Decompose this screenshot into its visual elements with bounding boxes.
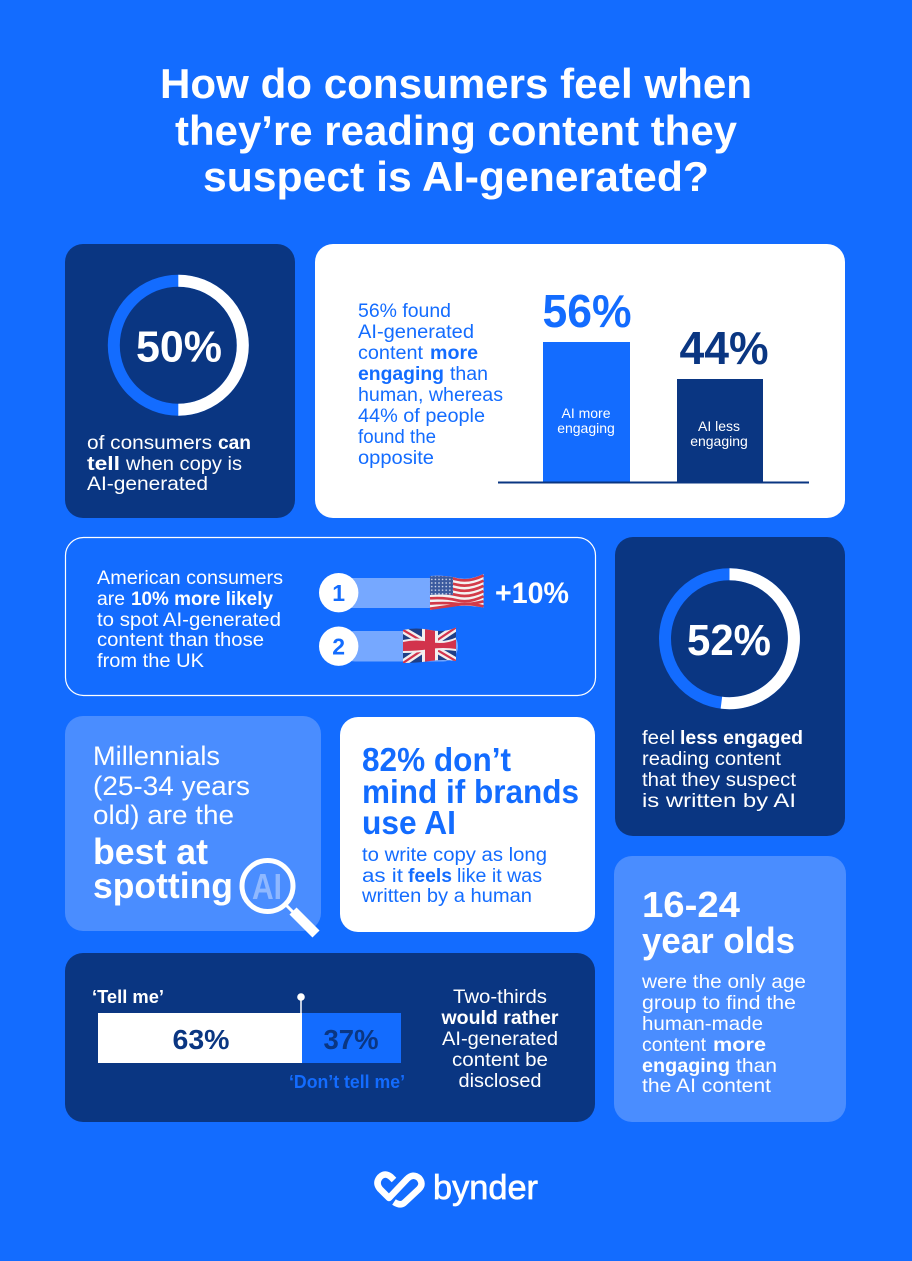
text: copy as long: as it bbox=[362, 866, 404, 887]
text: best at spotting: spotting bbox=[93, 865, 233, 906]
text: less engaged: that they suspect bbox=[642, 770, 797, 791]
donut chart: 50% bbox=[114, 281, 243, 410]
text: +10%: +10% bbox=[495, 577, 569, 610]
text: engagement summary: found the bbox=[358, 427, 436, 448]
text: American consumers: from the UK bbox=[97, 651, 204, 672]
icon: magnifier: AI bbox=[252, 866, 282, 907]
logo: bynder: bynder bbox=[433, 1169, 538, 1207]
panel: engagement bar chart bbox=[315, 244, 845, 518]
text: only age group: content bbox=[642, 1035, 707, 1056]
text: 16-24 headline: year olds bbox=[642, 920, 795, 961]
panel: 52% less engaged bbox=[615, 537, 845, 836]
text: Millennials bbox=[93, 741, 250, 830]
text: two-thirds: Two-thirds bbox=[453, 987, 547, 1008]
text: engagement summary: than bbox=[450, 364, 488, 385]
bar: AI less engaging bbox=[677, 322, 768, 482]
panel: Millennials bbox=[65, 716, 321, 934]
text: engagement summary: engaging bbox=[358, 364, 444, 385]
text: Millennials: (25-34 years bbox=[93, 771, 250, 801]
text: 82% headline: mind if brands bbox=[362, 773, 579, 810]
donut chart: 50%: 50% bbox=[136, 322, 222, 372]
text: less engaged bbox=[642, 728, 803, 812]
panel: 16-24 year olds bbox=[614, 856, 846, 1122]
panel: 82% don't mind bbox=[340, 717, 595, 932]
text: American consumers: American consumers bbox=[97, 568, 283, 589]
text: copy as long: like it was bbox=[457, 866, 542, 887]
text: 16-24 headline: 16-24 bbox=[642, 884, 740, 925]
text: engagement summary: 56% found bbox=[358, 301, 451, 322]
text: only age group: were the only age bbox=[641, 972, 806, 993]
ranking bar 2: 2 bbox=[332, 634, 345, 660]
icon: UK flag bbox=[403, 626, 457, 664]
title: suspect is AI-generated? bbox=[203, 153, 709, 200]
text: 16-24 headline bbox=[642, 884, 795, 961]
text: two-thirds: would rather bbox=[440, 1008, 559, 1029]
text: only age group: the AI content bbox=[642, 1076, 772, 1097]
text: best at spotting bbox=[93, 831, 233, 906]
bar: AI more engaging: AI more bbox=[561, 405, 611, 421]
text: best at spotting: best at bbox=[93, 831, 208, 872]
bar: AI less engaging: 44% bbox=[680, 322, 768, 374]
panel: 50% can tell bbox=[65, 244, 295, 518]
text: two-thirds: disclosed bbox=[458, 1071, 542, 1092]
text: only age group: engaging bbox=[642, 1056, 730, 1077]
text: engagement summary: more bbox=[430, 343, 478, 364]
label: Tell me: ‘Tell me’ bbox=[92, 987, 164, 1007]
text: can tell: tell bbox=[87, 454, 120, 475]
text: can tell: AI-generated bbox=[87, 474, 208, 495]
text: engagement summary: human, whereas bbox=[358, 385, 503, 406]
panel: US vs UK bbox=[66, 538, 596, 696]
text: copy as long bbox=[361, 845, 547, 907]
text: two-thirds: AI-generated bbox=[442, 1029, 558, 1050]
text: American consumers bbox=[97, 568, 283, 672]
text: engagement summary: 44% of people bbox=[358, 406, 485, 427]
text: 82% headline bbox=[362, 741, 579, 841]
marker pin bbox=[297, 993, 305, 1014]
text: less engaged: is written by AI bbox=[642, 791, 796, 812]
text: engagement summary: opposite bbox=[358, 448, 434, 469]
text: engagement summary: AI-generated bbox=[358, 322, 474, 343]
text: American consumers: content than those bbox=[97, 630, 264, 651]
text: engagement summary bbox=[358, 301, 503, 469]
ranking bar 1 bbox=[319, 573, 432, 612]
text: American consumers: 10% more likely bbox=[131, 589, 273, 610]
bar: AI more engaging bbox=[542, 285, 632, 482]
panel: disclosure bbox=[65, 953, 595, 1122]
text: only age group: more bbox=[713, 1035, 766, 1056]
title: they’re reading content they bbox=[175, 107, 738, 154]
text: can tell: when copy is bbox=[125, 454, 242, 475]
text: only age group: human-made bbox=[642, 1014, 763, 1035]
text: copy as long: written by a human bbox=[361, 886, 532, 907]
donut chart: 52% bbox=[665, 574, 794, 703]
text: can tell: can bbox=[218, 433, 251, 454]
text: Millennials: old) are the bbox=[93, 800, 234, 830]
text: American consumers: to spot AI-generated bbox=[97, 610, 281, 631]
text: can tell bbox=[87, 433, 251, 495]
text: copy as long: to write copy as long bbox=[362, 845, 547, 866]
icon: magnifier bbox=[242, 860, 316, 934]
text: can tell: of consumers bbox=[87, 433, 212, 454]
text: two-thirds bbox=[440, 987, 559, 1092]
text: American consumers: are bbox=[97, 589, 125, 610]
text: only age group: group to find the bbox=[642, 993, 796, 1014]
ranking bar 1: 1 bbox=[332, 580, 345, 606]
text: copy as long: feels bbox=[408, 866, 452, 887]
label: Don't tell me: ‘Don’t tell me’ bbox=[289, 1072, 405, 1092]
text: less engaged: feel bbox=[642, 728, 675, 749]
text: engagement summary: content bbox=[358, 343, 424, 364]
ranking bar 2 bbox=[319, 626, 458, 666]
bar: AI less engaging: AI less bbox=[698, 418, 740, 434]
text: two-thirds: content be bbox=[452, 1050, 548, 1071]
donut chart: 52%: 52% bbox=[687, 616, 771, 665]
text: Millennials: Millennials bbox=[93, 741, 220, 771]
text: 82% headline: use AI bbox=[362, 804, 456, 841]
stacked bar: 37%: 37% bbox=[324, 1024, 379, 1055]
text: less engaged: reading content bbox=[642, 749, 782, 770]
bar: AI less engaging: engaging bbox=[690, 433, 748, 449]
stacked bar: 63%: 63% bbox=[172, 1024, 230, 1055]
title bbox=[160, 60, 752, 200]
stacked bar: 63% bbox=[98, 1013, 302, 1063]
bar: AI more engaging: 56% bbox=[542, 285, 632, 337]
logo: bynder bbox=[378, 1169, 538, 1207]
text: 82% headline: 82% don’t bbox=[362, 741, 511, 778]
icon: US flag bbox=[430, 574, 484, 610]
bar: AI more engaging: engaging bbox=[557, 420, 615, 436]
stacked bar: 37% bbox=[302, 1013, 401, 1063]
icon: bynder heart bbox=[378, 1174, 422, 1204]
text: only age group: than bbox=[736, 1056, 777, 1077]
title: How do consumers feel when bbox=[160, 60, 752, 107]
text: less engaged: less engaged bbox=[680, 728, 803, 749]
text: only age group bbox=[641, 972, 806, 1097]
